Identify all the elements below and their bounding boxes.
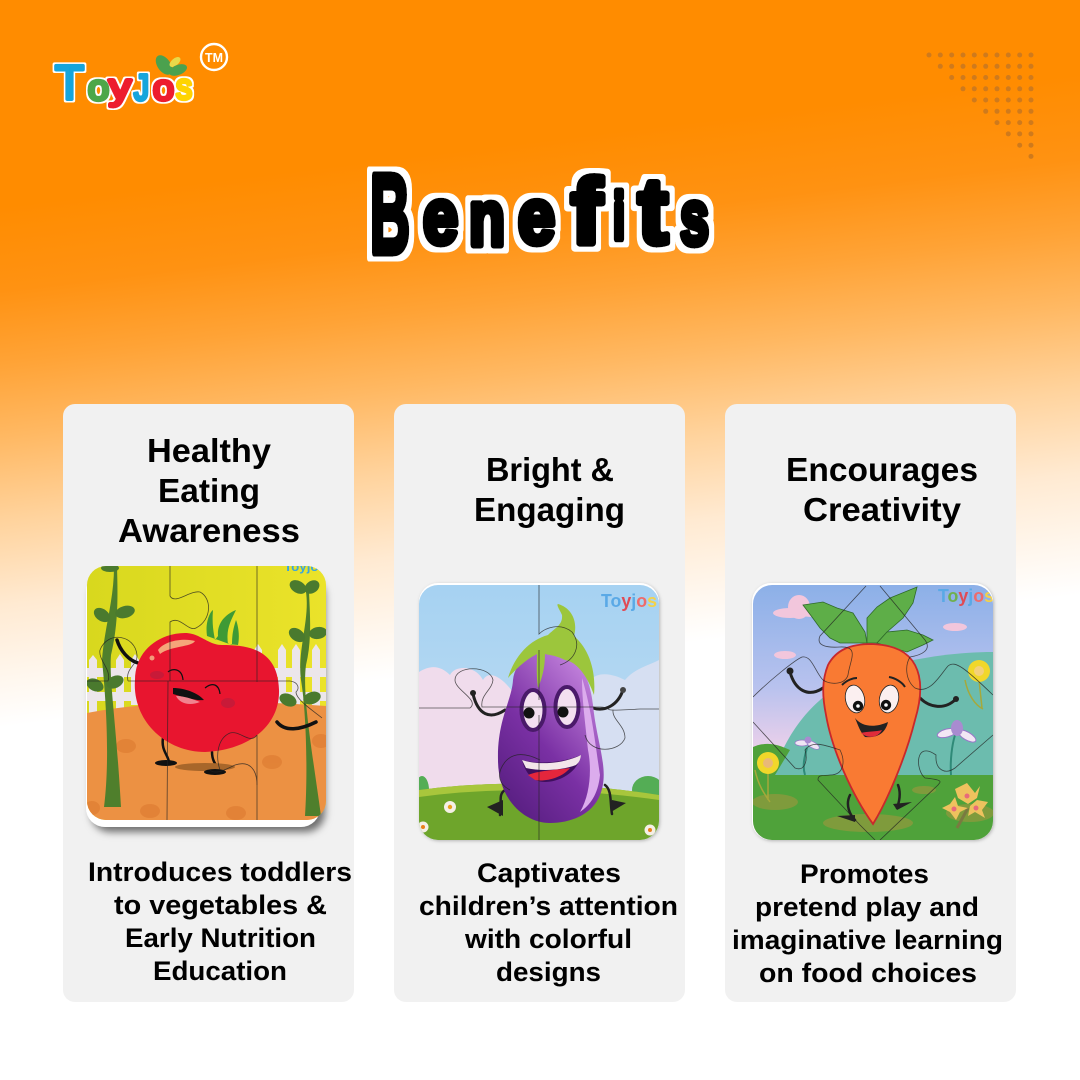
vine left: [102, 567, 121, 807]
logo wordmark: T: [55, 57, 84, 110]
eggplant stem and cap: [508, 604, 594, 695]
heading: Bright & Engaging: Engaging: [474, 491, 625, 528]
illustration: tomato puzzle: [84, 559, 330, 827]
logo wordmark: o: [153, 67, 174, 108]
description: healthy eating: Introduces toddlers: [88, 857, 352, 887]
icon: tomato stalk: [207, 610, 239, 645]
heading: Bright & Engaging: [474, 451, 625, 528]
small logo fragment: Toyjos: [938, 586, 994, 606]
eggplant limbs: [473, 690, 623, 815]
description: encourages creativity: imaginative learning: [732, 925, 1003, 955]
logo wordmark: s: [176, 66, 192, 107]
description: encourages creativity: on food choices: [759, 958, 977, 988]
decorative dot grid: [926, 52, 1034, 159]
illustration: carrot puzzle: [752, 583, 994, 840]
iris flowers: [795, 720, 978, 775]
description: encourages creativity: pretend play and: [755, 892, 979, 922]
puzzle cut lines: [419, 585, 659, 840]
heading: Encourages Creativity: Encourages: [786, 451, 978, 488]
clouds: [773, 595, 967, 659]
heading: Encourages Creativity: Creativity: [803, 491, 962, 528]
carrot limbs: [790, 672, 956, 820]
description: healthy eating: Education: [153, 956, 287, 986]
description: encourages creativity: Promotes: [800, 859, 929, 889]
trademark badge: [201, 44, 227, 70]
eggplant face: [522, 687, 581, 782]
heading: Healthy Eating Awareness: [118, 432, 300, 549]
small logo fragment: Toyjos: [284, 559, 326, 574]
icon: carrot body: [823, 644, 920, 824]
panel: Encourages Creativity: [725, 404, 1016, 1002]
vine right: [300, 592, 321, 816]
description: bright and engaging: with colorful: [464, 924, 632, 954]
heading: Bright & Engaging: Bright &: [486, 451, 614, 488]
icon: eggplant body: [498, 648, 604, 823]
puzzle cut lines: [753, 586, 993, 840]
description: encourages creativity: [732, 859, 1003, 988]
carrot leaves: [803, 587, 933, 652]
heading: Healthy Eating Awareness: Awareness: [118, 512, 300, 549]
small logo fragment: Toyjos: [601, 591, 657, 611]
title: Benefits: t: [638, 159, 668, 263]
trademark badge: TM: [205, 50, 223, 65]
title: Benefits: f: [571, 161, 602, 263]
icon: tomato body: [135, 633, 279, 752]
logo wordmark: o: [88, 67, 109, 108]
description: healthy eating: Early Nutrition: [125, 923, 316, 953]
heading: Encourages Creativity: [786, 451, 978, 528]
heading: Healthy Eating Awareness: Eating: [158, 472, 260, 509]
logo: Toyjos: [55, 44, 227, 110]
icon: logo leaves: [152, 52, 189, 78]
vine leaves: [84, 564, 328, 709]
description: healthy eating: [88, 857, 352, 986]
tomato legs and arms: [117, 640, 316, 772]
description: bright and engaging: designs: [496, 957, 601, 987]
description: bright and engaging: [419, 858, 678, 987]
illustration: eggplant puzzle: [415, 583, 664, 840]
title: Benefits: e: [423, 172, 458, 260]
panel: Healthy Eating Awareness: [63, 404, 354, 1002]
title: Benefits: s: [680, 173, 709, 261]
meadow flowers: [418, 801, 656, 836]
title: Benefits: e: [518, 172, 555, 260]
description: bright and engaging: Captivates: [477, 858, 621, 888]
logo wordmark: J: [134, 67, 149, 108]
dandelions: [755, 660, 990, 802]
title: Benefits: i: [613, 179, 625, 253]
orange lilies: [942, 783, 988, 828]
heading: Healthy Eating Awareness: Healthy: [147, 432, 272, 469]
description: healthy eating: to vegetables &: [114, 890, 327, 920]
panel: Bright & Engaging: [394, 404, 685, 1002]
description: bright and engaging: children’s attention: [419, 891, 678, 921]
logo wordmark: y: [109, 66, 131, 107]
title: Benefits: n: [469, 174, 505, 262]
puzzle cut lines: [87, 566, 322, 820]
carrot face: [842, 677, 905, 737]
title: Benefits: B: [370, 151, 410, 277]
